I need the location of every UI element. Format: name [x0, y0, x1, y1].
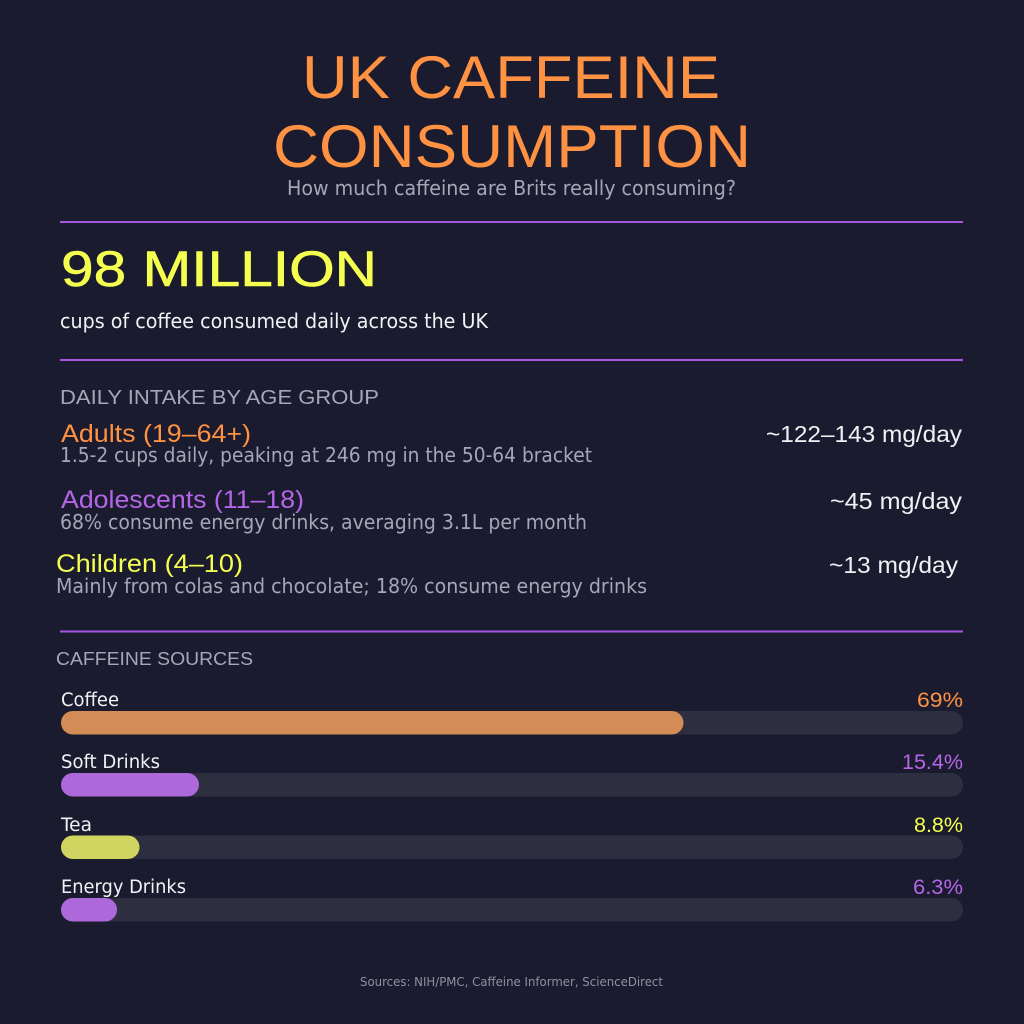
bar: soft drinks 15.4%: 15.4%: [902, 751, 963, 774]
row: adults: 1.5-2 cups daily, peaking at 246 mg in the 50-64 bracket: [60, 443, 592, 467]
panel: daily intake by age group: [56, 387, 963, 598]
bar: coffee 69%: Coffee: [61, 690, 119, 711]
bar: soft drinks 15.4%: [61, 751, 963, 796]
bar: coffee 69%: [61, 689, 963, 734]
row: adolescents: [60, 486, 963, 534]
sources footer: Sources: NIH/PMC, Caffeine Informer, ScienceDirect: [360, 974, 663, 989]
bar: energy drinks 6.3%: 6.3%: [913, 876, 963, 899]
row: adolescents: 68% consume energy drinks, averaging 3.1L per month: [60, 510, 587, 534]
bar: energy drinks 6.3%: [61, 876, 963, 922]
row: children: ~13 mg/day: [829, 552, 959, 578]
subtitle: How much caffeine are Brits really consuming?: [287, 176, 736, 200]
title: [273, 44, 751, 180]
bar: coffee 69%: 69%: [917, 689, 963, 712]
section heading: DAILY INTAKE BY AGE GROUP: [60, 387, 379, 409]
row: children: Children (4–10): [56, 550, 243, 578]
row: adults: ~122–143 mg/day: [766, 421, 963, 447]
row: adolescents: Adolescents (11–18): [61, 486, 304, 514]
bar: tea 8.8%: Tea: [60, 815, 92, 836]
row: children: Mainly from colas and chocolate; 18% consume energy drinks: [56, 574, 647, 598]
panel: headline stat: [60, 241, 489, 333]
bar: tea 8.8%: [60, 814, 963, 859]
row: adolescents: ~45 mg/day: [830, 488, 963, 514]
stat caption: cups of coffee consumed daily across the UK: [60, 309, 489, 333]
row: children: [56, 550, 959, 598]
bar: tea 8.8%: 8.8%: [914, 814, 963, 837]
title: UK CAFFEINE: [302, 44, 720, 111]
row: adults: [60, 420, 963, 467]
stat value: 98 MILLION: [61, 241, 377, 297]
bar: soft drinks 15.4%: Soft Drinks: [61, 752, 160, 773]
row: adults: Adults (19–64+): [61, 420, 251, 448]
section heading: CAFFEINE SOURCES: [56, 649, 253, 669]
bar: energy drinks 6.3%: Energy Drinks: [61, 877, 186, 898]
title: CONSUMPTION: [273, 113, 751, 180]
panel: caffeine sources: [56, 649, 963, 922]
